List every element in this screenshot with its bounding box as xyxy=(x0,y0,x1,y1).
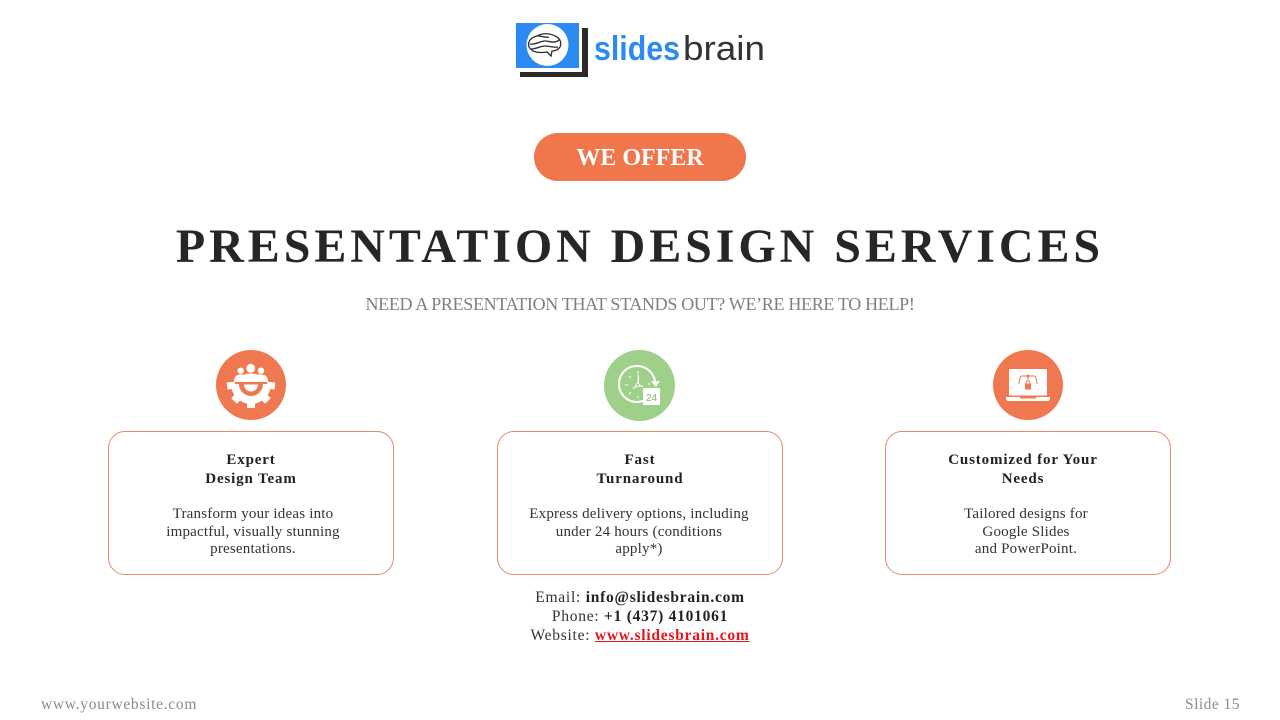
icon: team gear xyxy=(216,350,286,420)
logo icon: brain in blue square xyxy=(516,23,588,77)
footer: website: www.yourwebsite.com xyxy=(41,696,197,713)
card heading: Fast xyxy=(625,452,655,468)
contact details xyxy=(530,589,750,644)
card heading line 2: Design Team xyxy=(205,471,297,487)
contact details: Email: info@slidesbrain.com xyxy=(535,589,745,606)
logo wordmark: slides xyxy=(594,30,680,68)
card body: apply*) xyxy=(615,541,663,557)
panel: fast turnaround xyxy=(497,431,783,575)
logo wordmark: brain xyxy=(683,30,765,68)
panel: customized for your needs xyxy=(885,431,1171,575)
logo wordmark xyxy=(594,30,765,68)
icon label: 24: 24 xyxy=(646,393,657,404)
panel: expert design team xyxy=(108,431,394,575)
card body xyxy=(166,506,340,557)
logo: slidesbrain xyxy=(516,23,765,77)
badge: we offer xyxy=(534,133,746,181)
card heading: Customized for Your xyxy=(948,452,1098,468)
contact details: Website: www.slidesbrain.com xyxy=(530,627,750,644)
card body: under 24 hours (conditions xyxy=(556,524,722,540)
card body: Tailored designs for xyxy=(964,506,1088,522)
contact details: Phone: +1 (437) 4101061 xyxy=(552,608,728,625)
badge: we offer: WE OFFER xyxy=(576,145,704,171)
icon: 24 hour clock xyxy=(604,350,675,421)
card body xyxy=(964,506,1088,557)
icon: laptop with design tool xyxy=(993,350,1063,420)
card body: presentations. xyxy=(210,541,296,557)
card body: impactful, visually stunning xyxy=(166,524,340,540)
card heading: Expert xyxy=(226,452,276,468)
card body: Transform your ideas into xyxy=(173,506,333,522)
footer: slide number: Slide 15 xyxy=(1185,696,1240,713)
title: PRESENTATION DESIGN SERVICES xyxy=(176,220,1104,273)
card heading line 2: Turnaround xyxy=(597,471,683,487)
card heading line 2: Needs xyxy=(1002,471,1044,487)
card body: Google Slides xyxy=(982,524,1070,540)
card body: and PowerPoint. xyxy=(975,541,1077,557)
card body: Express delivery options, including xyxy=(529,506,749,522)
subtitle: NEED A PRESENTATION THAT STANDS OUT? WE’RE HERE TO HELP! xyxy=(365,294,915,314)
card body xyxy=(529,506,749,557)
